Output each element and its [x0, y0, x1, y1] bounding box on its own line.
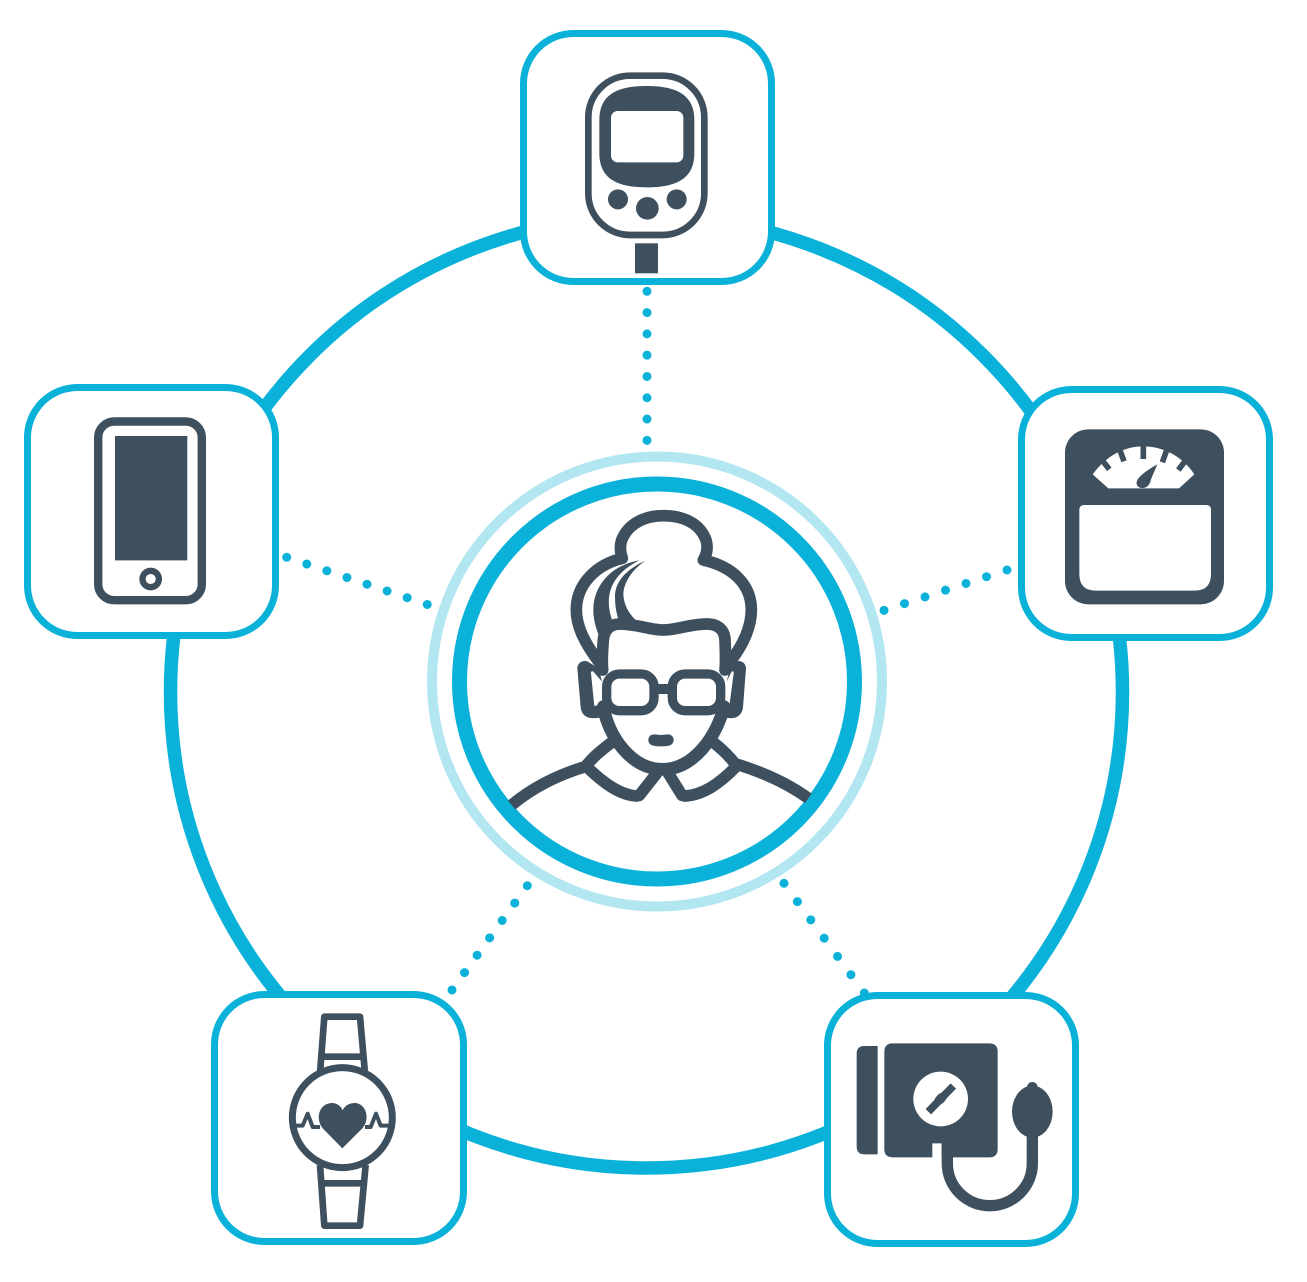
panel: blood pressure monitor — [828, 996, 1076, 1244]
panel: glucose meter — [524, 34, 772, 282]
icon: smartwatch with heart — [292, 1017, 392, 1226]
icon: elderly woman with glasses — [512, 516, 808, 805]
panel: weighing scale — [1022, 390, 1270, 638]
panel: smartwatch — [214, 994, 464, 1242]
icon: weighing scale — [1065, 429, 1224, 604]
icon: smartphone — [98, 422, 202, 600]
outer ring — [170, 216, 1122, 1168]
panel: smartphone — [28, 388, 276, 636]
icon: glucose meter — [588, 76, 704, 273]
center halo ring — [432, 456, 882, 906]
dotted connectors — [287, 291, 1007, 993]
center portrait ring — [460, 484, 854, 879]
icon: blood pressure monitor — [857, 1043, 1053, 1206]
